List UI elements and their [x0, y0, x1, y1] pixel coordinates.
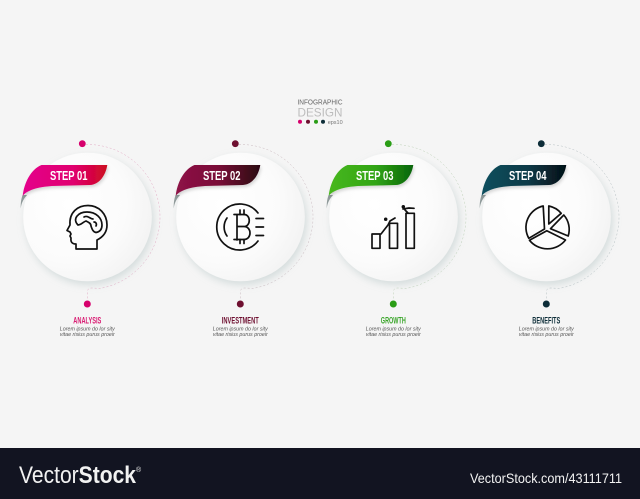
panel: step 01 analysis — [21, 140, 160, 338]
icon: head with brain — [67, 206, 107, 249]
description text: Lorem ipsum do lor sity — [60, 326, 115, 332]
description text — [366, 326, 421, 338]
footer url: VectorStock.com/43111711 — [470, 470, 622, 486]
step label: STEP 01 — [50, 168, 88, 183]
description text: vitae risius purus proeir — [519, 332, 574, 338]
description text: Lorem ipsum do lor sity — [213, 326, 268, 332]
ribbon: step 02 — [176, 165, 260, 196]
description text: Lorem ipsum do lor sity — [519, 326, 574, 332]
label: analysis: ANALYSIS — [73, 315, 101, 325]
heading: infographic design: DESIGN — [298, 106, 342, 120]
description text — [60, 326, 115, 338]
step label: STEP 02 — [203, 168, 240, 183]
ribbon: step 03 — [329, 165, 413, 196]
heading: infographic design: INFOGRAPHIC — [298, 98, 342, 107]
description text: vitae risius purus proeir — [213, 332, 268, 338]
heading: infographic design: eps10 — [328, 120, 343, 126]
label: growth: GROWTH — [381, 315, 406, 325]
panel: step 02 investment — [174, 140, 313, 338]
description text: vitae risius purus proeir — [60, 332, 115, 338]
icon: growth bars — [372, 206, 414, 248]
description text: Lorem ipsum do lor sity — [366, 326, 421, 332]
heading: infographic design — [298, 98, 343, 126]
step label: STEP 04 — [509, 168, 547, 183]
label: investment: INVESTMENT — [222, 315, 259, 325]
footer bar — [0, 448, 640, 499]
description text — [519, 326, 574, 338]
icon: pie chart — [526, 206, 569, 249]
label: benefits: BENEFITS — [532, 315, 560, 325]
panel: step 04 benefits — [480, 140, 619, 338]
footer logo: VectorStock — [19, 462, 137, 489]
description text: vitae risius purus proeir — [366, 332, 421, 338]
description text — [213, 326, 268, 338]
ribbon: step 01 — [23, 165, 107, 196]
step label: STEP 03 — [356, 168, 394, 183]
icon: bitcoin — [217, 204, 264, 250]
ribbon: step 04 — [482, 165, 566, 196]
panel: step 03 growth — [327, 140, 466, 338]
footer registered mark: ® — [136, 466, 142, 474]
